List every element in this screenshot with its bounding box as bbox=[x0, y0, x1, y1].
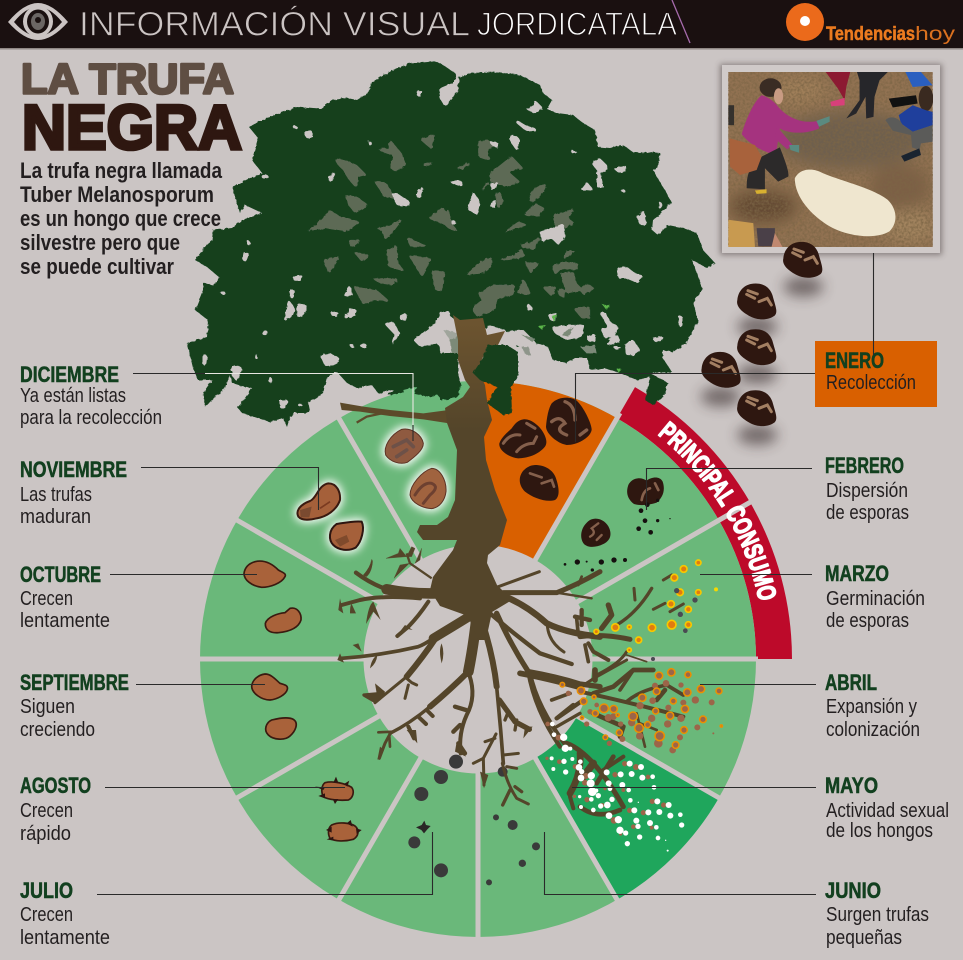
truffles: diciembre and noviembre with glow bbox=[244, 429, 446, 633]
intro text: silvestre pero que bbox=[20, 230, 180, 255]
label: mayo bbox=[825, 773, 949, 842]
truffles: enero and febrero bbox=[499, 398, 671, 572]
dots: junio bbox=[486, 767, 540, 885]
label: junio: JUNIO bbox=[825, 878, 881, 903]
red band: principal consumo bbox=[617, 387, 792, 659]
crown lumps in front of trunk bbox=[440, 345, 518, 415]
label: septiembre: SEPTIEMBRE bbox=[20, 670, 129, 695]
branch at top of diciembre sector bbox=[340, 403, 453, 424]
label: abril: ABRIL bbox=[825, 670, 877, 695]
truffles: octubre bbox=[244, 561, 301, 633]
label: abril bbox=[825, 670, 920, 741]
root leaves bbox=[337, 559, 533, 788]
label: marzo: MARZO bbox=[825, 561, 889, 586]
label: febrero bbox=[825, 453, 909, 524]
logo: Tendencias hoy: Tendencias bbox=[826, 24, 915, 45]
label: noviembre bbox=[20, 457, 127, 528]
label: septiembre: Siguen bbox=[20, 695, 75, 718]
label: mayo: MAYO bbox=[825, 773, 878, 798]
roots and leaves in diciembre sector bbox=[363, 547, 432, 578]
label: julio: Crecen bbox=[20, 903, 73, 926]
label: junio: pequeñas bbox=[826, 926, 902, 949]
label: octubre: OCTUBRE bbox=[20, 562, 101, 587]
label: junio: Surgen trufas bbox=[826, 903, 929, 926]
label: febrero: FEBRERO bbox=[825, 453, 904, 478]
purple slash bbox=[672, 0, 690, 43]
spores: febrero bbox=[564, 499, 671, 572]
author name: JORDICATALA bbox=[477, 6, 677, 42]
floating truffles with shadows bbox=[701, 242, 823, 445]
crown light leaf patches bbox=[303, 134, 595, 318]
logo: Tendencias hoy: hoy bbox=[915, 24, 956, 45]
label: septiembre bbox=[20, 670, 129, 741]
leader lines bbox=[97, 253, 874, 894]
label: marzo: de esporas bbox=[826, 609, 909, 632]
branches: marzo bbox=[575, 575, 683, 675]
truffle 2 bbox=[737, 284, 776, 319]
label: agosto: AGOSTO bbox=[20, 773, 91, 798]
title: NEGRA bbox=[22, 93, 242, 163]
header bar bbox=[0, 0, 963, 50]
label: marzo bbox=[825, 561, 925, 632]
label: marzo: Germinación bbox=[826, 587, 925, 610]
spores: abril bbox=[520, 660, 722, 753]
sector dividers bbox=[198, 413, 758, 940]
label: noviembre: maduran bbox=[20, 505, 91, 528]
label: julio: lentamente bbox=[20, 926, 110, 949]
label: abril: Expansión y bbox=[826, 695, 918, 718]
label: diciembre: Ya están listas bbox=[20, 384, 126, 407]
label: agosto: Crecen bbox=[20, 799, 73, 822]
truffles: septiembre and agosto, dots: julio bbox=[252, 674, 463, 877]
spores: marzo bbox=[575, 560, 718, 675]
label box: enero bbox=[815, 341, 937, 407]
intro text: es un hongo que crece bbox=[20, 206, 221, 231]
label: mayo: de los hongos bbox=[826, 819, 933, 842]
tree crown bbox=[187, 61, 715, 427]
label: febrero: de esporas bbox=[826, 501, 909, 524]
label: julio: JULIO bbox=[20, 878, 73, 903]
sector: enero bbox=[478, 381, 617, 659]
label: agosto: rápido bbox=[20, 822, 71, 845]
branches: abril bbox=[520, 660, 683, 747]
intro text: Tuber Melanosporum bbox=[20, 182, 214, 207]
label: octubre: Crecen bbox=[20, 587, 73, 610]
label: agosto bbox=[20, 773, 91, 845]
label box: enero: Recolección bbox=[826, 371, 916, 394]
sector: mayo bbox=[478, 659, 719, 900]
green disc of months bbox=[200, 381, 756, 937]
label: noviembre: NOVIEMBRE bbox=[20, 457, 127, 482]
truffle 1 bbox=[783, 242, 822, 278]
label: julio bbox=[20, 878, 110, 949]
label: abril: colonización bbox=[826, 718, 920, 741]
label: noviembre: Las trufas bbox=[20, 483, 92, 506]
label: febrero: Dispersión bbox=[826, 479, 908, 502]
tree trunk bbox=[417, 315, 512, 640]
title bbox=[21, 56, 242, 163]
label: junio bbox=[825, 878, 929, 949]
branches: mayo bbox=[530, 673, 623, 814]
intro text: La trufa negra llamada bbox=[20, 158, 222, 183]
bright green leaves bbox=[537, 304, 622, 373]
truffle 3 bbox=[737, 329, 776, 365]
header title: INFORMACIÓN VISUAL bbox=[79, 4, 470, 44]
crown gaps bbox=[203, 77, 682, 408]
photo: woman and pig hunting truffles bbox=[720, 64, 942, 255]
label: octubre: lentamente bbox=[20, 609, 110, 632]
centre hole bbox=[364, 544, 592, 774]
title: LA TRUFA bbox=[21, 56, 234, 104]
label: diciembre bbox=[20, 362, 162, 429]
label: diciembre: para la recolección bbox=[20, 406, 162, 429]
band label: PRINCIPAL CONSUMO bbox=[658, 420, 776, 600]
label: diciembre: DICIEMBRE bbox=[20, 362, 119, 387]
light green gaps bbox=[390, 387, 445, 407]
grey leaves seen through gaps bbox=[443, 327, 597, 355]
label box: enero: ENERO bbox=[825, 348, 884, 373]
icon: eye logo bbox=[8, 3, 68, 40]
label: octubre bbox=[20, 562, 110, 632]
logo: Tendencias hoy bbox=[786, 3, 956, 45]
calendar wheel bbox=[198, 381, 792, 940]
spores: mayo bbox=[530, 673, 684, 852]
truffle 5 bbox=[737, 390, 776, 426]
truffle 4 bbox=[701, 352, 741, 388]
intro text: se puede cultivar bbox=[20, 254, 174, 279]
label: septiembre: creciendo bbox=[20, 718, 95, 741]
intro text bbox=[20, 158, 222, 279]
roots bbox=[342, 572, 600, 805]
